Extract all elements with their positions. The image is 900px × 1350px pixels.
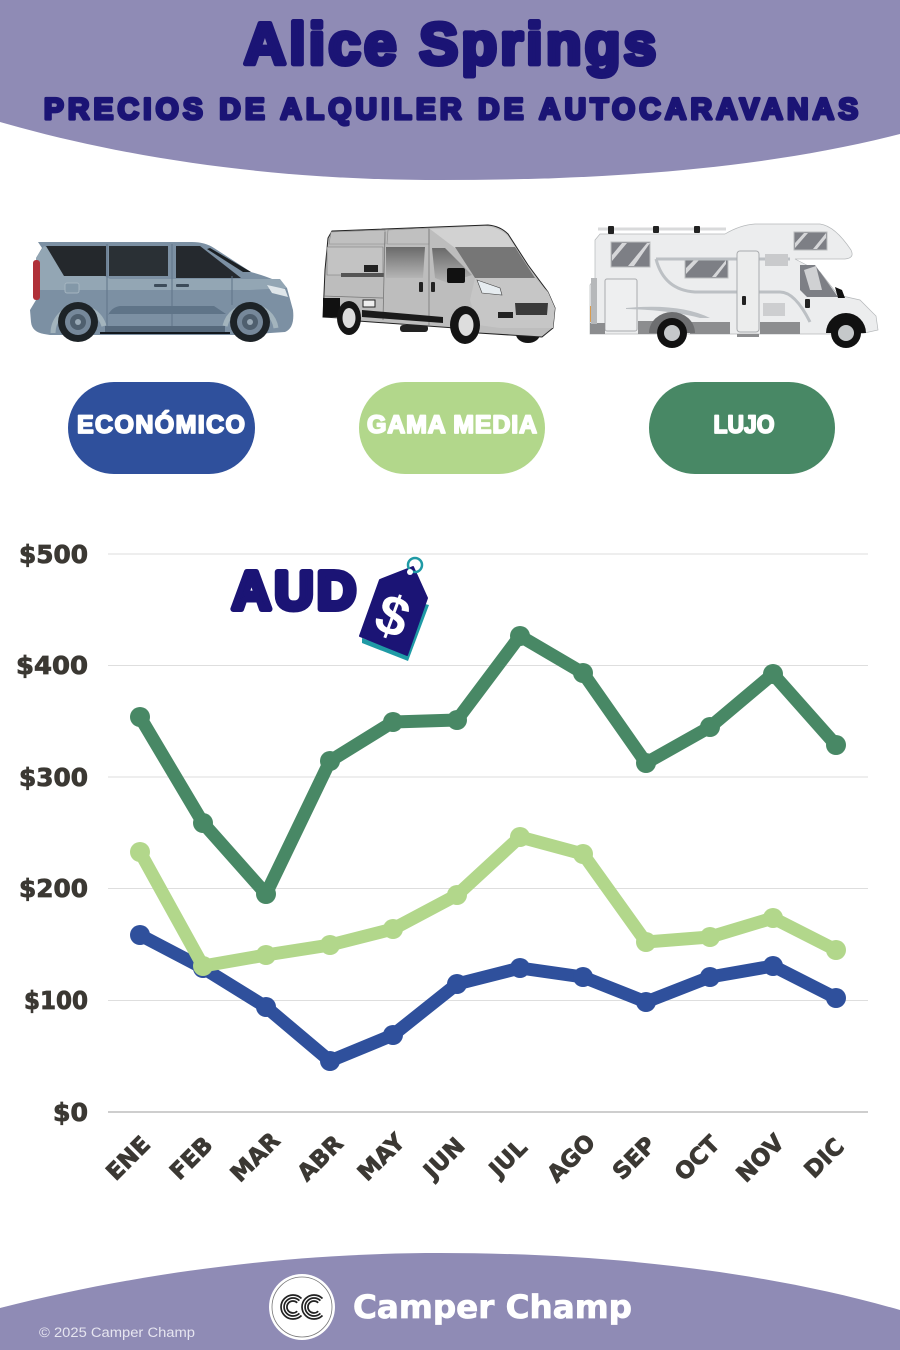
x axis labels: NOV — [732, 1130, 790, 1188]
series: económico — [130, 925, 846, 1071]
y axis labels: $200 — [19, 874, 88, 903]
x axis labels: JUN — [418, 1133, 470, 1186]
legend pill: gama media — [359, 382, 545, 474]
x axis labels: ABR — [293, 1131, 349, 1187]
y axis labels: $400 — [16, 651, 88, 680]
logo: CC badge — [269, 1274, 335, 1340]
x axis labels: MAY — [353, 1129, 411, 1186]
x axis labels — [102, 1128, 850, 1188]
x axis labels: AGO — [543, 1130, 601, 1188]
currency label: AUD: AUD — [232, 561, 356, 621]
y axis labels — [16, 540, 88, 1127]
x axis labels: ENE — [102, 1132, 156, 1186]
x axis labels: SEP — [608, 1132, 661, 1185]
x axis labels: JUL — [483, 1134, 533, 1184]
y axis labels: $100 — [24, 986, 88, 1015]
legend pill: económico: ECONÓMICO — [77, 409, 245, 439]
icon: luxury motorhome — [590, 224, 878, 348]
series: gama media — [130, 827, 846, 976]
icon: price tag: $ — [367, 581, 418, 650]
footer banner — [0, 1253, 900, 1350]
y axis labels: $500 — [19, 540, 88, 569]
legend pill: lujo: LUJO — [714, 411, 774, 439]
x axis labels: MAR — [226, 1128, 286, 1188]
header banner — [0, 0, 900, 180]
brand name: Camper Champ — [353, 1288, 632, 1326]
y axis labels: $300 — [19, 763, 88, 792]
legend pill: lujo — [649, 382, 835, 474]
icon: mid-range van — [323, 225, 555, 344]
series: lujo — [130, 626, 846, 904]
legend pill: económico — [68, 382, 255, 474]
line chart — [16, 540, 868, 1188]
legend pill: gama media: GAMA MEDIA — [367, 411, 537, 439]
copyright: © 2025 Camper Champ — [39, 1325, 195, 1340]
x axis labels: DIC — [800, 1134, 850, 1184]
icon: economy minivan — [30, 242, 293, 342]
subtitle: PRECIOS DE ALQUILER DE AUTOCARAVANAS — [44, 93, 858, 126]
x axis labels: FEB — [165, 1132, 218, 1185]
x axis labels: OCT — [670, 1131, 726, 1186]
y axis labels: $0 — [53, 1098, 88, 1127]
title: Alice Springs — [244, 12, 656, 77]
icon: price tag — [360, 558, 429, 661]
